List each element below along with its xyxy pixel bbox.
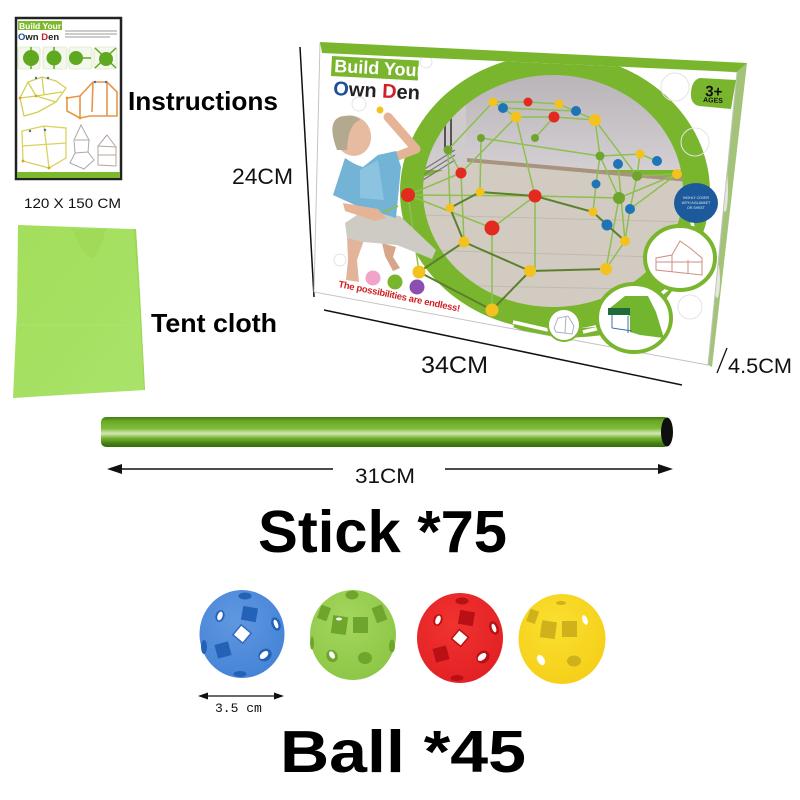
heading: stick count: Stick *75 xyxy=(258,499,507,565)
heading: Tent cloth: Tent cloth xyxy=(151,308,277,338)
label: cloth size: 120 X 150 CM xyxy=(24,195,121,211)
near leg xyxy=(346,236,364,282)
faint dots decoration xyxy=(334,56,709,319)
hair xyxy=(332,116,360,150)
icon: yellow ball xyxy=(518,594,606,684)
label: box depth xyxy=(717,348,792,378)
heading: Instructions: Instructions xyxy=(128,86,278,116)
label: box length: 34CM xyxy=(421,352,488,379)
raised arm xyxy=(388,117,416,157)
icon: red ball xyxy=(417,593,503,683)
age badge: 3+ xyxy=(705,83,723,101)
head xyxy=(330,112,376,160)
arrow: ball diameter xyxy=(198,692,284,700)
inset: small frame xyxy=(548,309,580,341)
label: box depth: 4.5CM xyxy=(728,355,792,378)
trousers xyxy=(345,211,436,259)
blue info badge xyxy=(674,183,718,223)
blue info badge: OR SHEET xyxy=(687,206,706,210)
icon: green stick xyxy=(101,417,673,447)
arrow: stick length xyxy=(107,464,673,474)
blue info badge: WITH A BLANKET xyxy=(682,201,711,205)
box title xyxy=(331,56,424,105)
label: box height: 24CM xyxy=(232,164,293,189)
t-shirt xyxy=(333,151,401,218)
label: box length xyxy=(324,310,682,385)
inset track xyxy=(513,290,672,338)
inset: covered tent xyxy=(597,284,671,352)
inset: frame fort xyxy=(645,226,715,290)
fort frame xyxy=(408,102,677,310)
icon: green ball xyxy=(310,590,396,680)
label: box height xyxy=(232,47,314,297)
icon: blue ball xyxy=(200,590,284,678)
label: ball diameter: 3.5 cm xyxy=(215,701,262,716)
toy in hand xyxy=(376,106,384,114)
panel: instructions poster: Own Den xyxy=(18,32,59,43)
panel: product box xyxy=(314,42,747,367)
boy figure xyxy=(330,106,436,282)
far leg xyxy=(382,243,400,271)
box title: Build Your xyxy=(334,56,424,81)
blue info badge: HIGHLY COVER xyxy=(683,196,710,200)
room photo xyxy=(420,70,690,310)
fort balls xyxy=(401,98,682,316)
label: stick length: 31CM xyxy=(355,464,415,488)
lower arm xyxy=(343,203,386,221)
age badge xyxy=(691,78,736,109)
box title: Own Den xyxy=(333,78,420,105)
panel: instructions poster: Build Your xyxy=(19,21,62,31)
panel: instructions poster xyxy=(16,18,121,179)
box slogan: The possibilities are endless! xyxy=(337,279,461,315)
icon: folded tent cloth xyxy=(13,225,145,398)
age badge: AGES xyxy=(703,97,723,105)
heading: ball count: Ball *45 xyxy=(280,719,526,785)
green ring xyxy=(400,54,710,330)
